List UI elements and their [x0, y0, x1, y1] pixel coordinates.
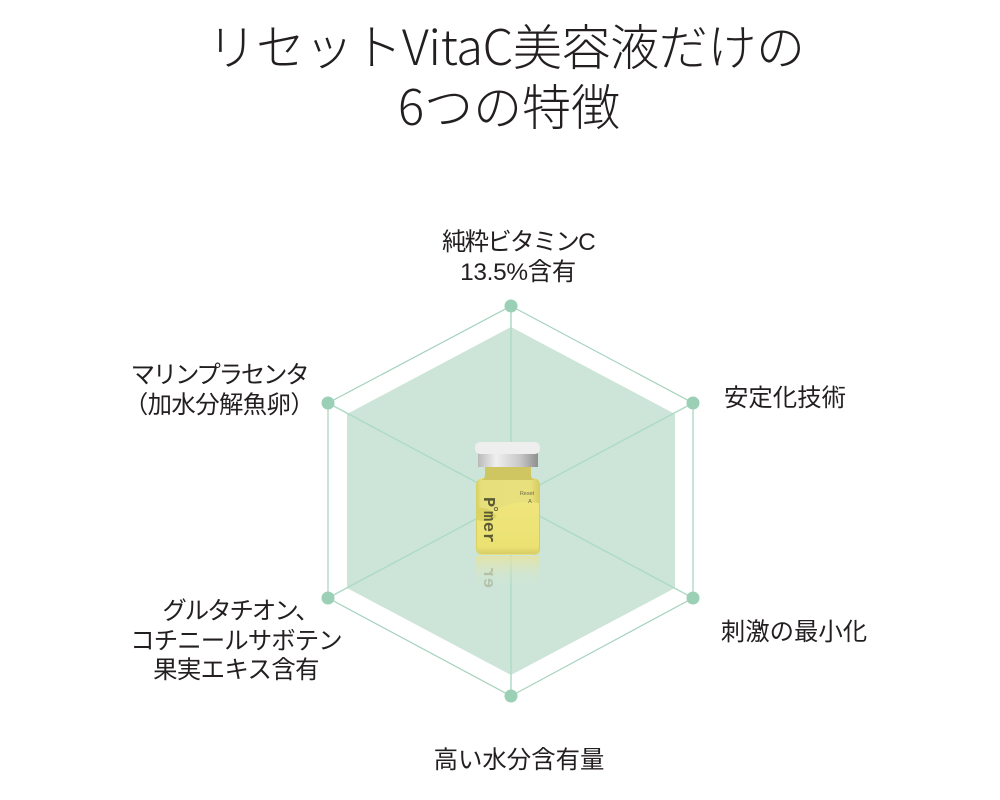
- vial image: A: [528, 499, 532, 505]
- label: lower left: 果実エキス含有: [153, 657, 319, 684]
- title: [207, 9, 805, 140]
- label: lower left: グルタチオン、: [162, 598, 318, 625]
- label: top: 13.5%含有: [460, 258, 576, 286]
- vial image: [475, 442, 540, 599]
- metal collar: [478, 453, 538, 467]
- cap: [475, 442, 540, 454]
- axes: [328, 306, 693, 696]
- label: top: [442, 229, 595, 286]
- label: upper left: [124, 362, 314, 418]
- label: upper left: マリンプラセンタ: [131, 362, 307, 389]
- label: bottom: 高い水分含有量: [434, 747, 604, 774]
- label: upper left: （加水分解魚卵）: [124, 392, 314, 418]
- axis dots: [322, 300, 700, 702]
- title: 6つの特徴: [398, 69, 620, 140]
- vial reflection: [476, 556, 540, 588]
- vial body: [476, 478, 540, 555]
- label: lower left: コチニールサボテン: [130, 628, 342, 654]
- vial reflection: mer: [478, 567, 497, 599]
- label: top: 純粋ビタミンC: [442, 229, 594, 256]
- hexagon outline: [328, 306, 693, 696]
- brand text: P: [478, 497, 497, 507]
- hexagon fill: [347, 327, 675, 675]
- neck: [481, 467, 535, 480]
- powder: [477, 502, 539, 554]
- title: リセットVitaC美容液だけの: [207, 9, 805, 80]
- vial image: mer: [478, 511, 497, 543]
- label: lower right: 刺激の最小化: [721, 619, 867, 646]
- vial image: Reset: [520, 491, 535, 497]
- label: lower left: [130, 598, 342, 684]
- radar chart: [322, 300, 700, 702]
- label: upper right: 安定化技術: [724, 385, 846, 412]
